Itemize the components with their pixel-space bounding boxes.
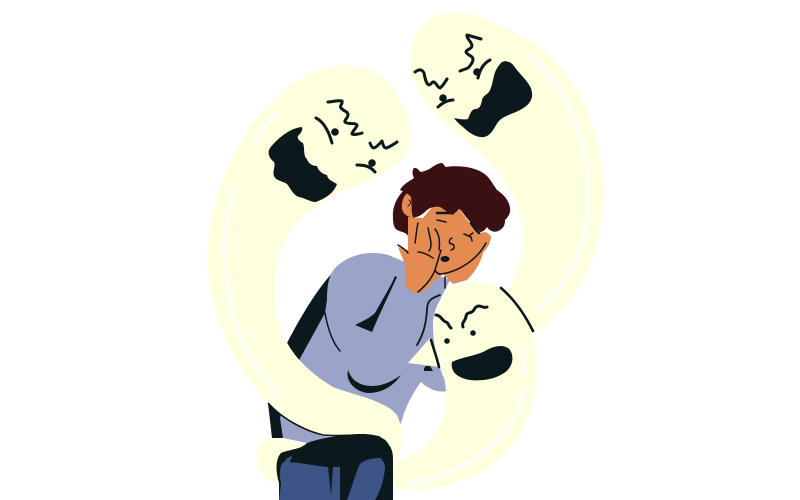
man: lower back shadow [268, 403, 285, 438]
man: ear [402, 191, 418, 217]
man: mouth [440, 256, 450, 262]
ghost hand [408, 338, 440, 367]
jeans: left leg [279, 462, 340, 500]
ghost: bottom centre, in front of the man [393, 282, 536, 490]
ghost highlight [531, 54, 589, 311]
ghost: left, wrapping around the man [207, 65, 410, 467]
man: back shadow [287, 272, 333, 365]
jeans: pocket [283, 456, 292, 468]
ghost: top right, behind the man [410, 13, 603, 336]
ghost outline strokes [431, 288, 533, 367]
man: back hair [393, 190, 416, 236]
man: hair [400, 163, 510, 232]
man: shirt creases [348, 276, 433, 393]
ghost eyes [444, 330, 476, 344]
ghost tail lobe behind the man [257, 438, 310, 483]
ghost highlights [225, 114, 279, 395]
man: face and hands [398, 204, 491, 294]
man: closed eye [437, 213, 479, 233]
ghost eyes and brows [415, 35, 490, 107]
ghost mouth [452, 346, 512, 380]
ghost highlights [411, 345, 524, 483]
ghost eyes and brows [316, 101, 397, 172]
man: facial lines [398, 200, 486, 292]
man: waistband and jeans [268, 403, 393, 500]
man [268, 163, 510, 443]
jeans: right leg [347, 458, 385, 500]
ghost mouth [269, 127, 337, 202]
man: lavender shirt [280, 253, 450, 443]
ghost mouth [454, 61, 532, 137]
ghost brows [436, 306, 487, 328]
